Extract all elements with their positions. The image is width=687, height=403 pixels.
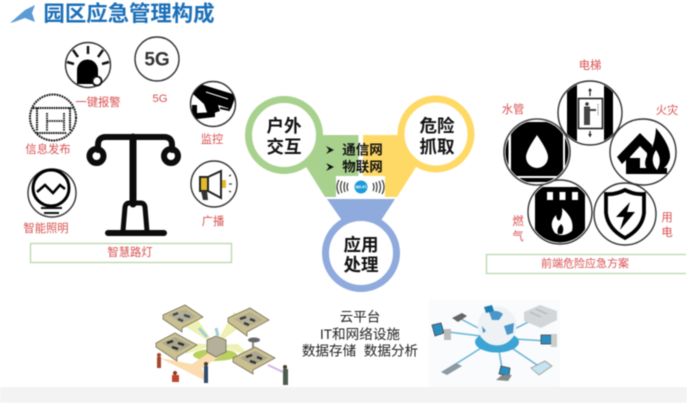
text: cloud platform: 云平台 <box>340 310 380 324</box>
icon: wifi: Wi-Fi <box>356 184 366 190</box>
label: gas: 燃 <box>512 214 524 228</box>
label: gas <box>512 214 524 243</box>
node: outdoor interaction: 户外 <box>266 116 302 136</box>
node: hazard capture: 抓取 <box>420 137 455 157</box>
icon: gas <box>528 180 592 244</box>
node: hazard capture: 危险 <box>420 116 455 136</box>
icon: information display <box>30 94 76 140</box>
text: networks: 通信网 <box>342 142 383 158</box>
icon: 5G: 5G <box>144 50 170 70</box>
text: networks <box>326 142 383 174</box>
title: 园区应急管理构成 <box>43 1 215 26</box>
label: gas: 气 <box>512 229 524 243</box>
node: application processing: 应用 <box>344 235 378 255</box>
text: cloud platform: 数据存储 数据分析 <box>302 344 418 358</box>
node: application processing: 处理 <box>344 255 379 275</box>
connector: blue <box>327 199 395 222</box>
image: global network <box>429 300 560 387</box>
caption box: smart street lamp: 智慧路灯 <box>107 245 153 259</box>
label: information release: 信息发布 <box>25 142 71 156</box>
icon: one-key alarm <box>66 42 110 88</box>
icon: smart lighting <box>28 169 76 217</box>
icon: fire <box>610 119 676 185</box>
caption box: front-end hazard plan: 前端危险应急方案 <box>541 256 629 270</box>
text: networks: 物联网 <box>342 158 383 174</box>
node: outdoor interaction <box>248 100 320 170</box>
label: one-key alarm: 一键报警 <box>75 95 121 109</box>
node: outdoor interaction: 交互 <box>266 137 302 157</box>
node: hazard capture <box>401 99 471 169</box>
icon: electricity shield <box>594 183 656 245</box>
caption box: front-end hazard plan <box>486 254 686 274</box>
icon: wifi <box>336 176 385 198</box>
label: broadcast: 广播 <box>202 214 225 228</box>
label: 5G: 5G <box>152 93 168 105</box>
panel: front-end hazard response <box>486 59 686 274</box>
label: water pipe: 水管 <box>502 102 524 116</box>
label: elevator: 电梯 <box>579 59 601 72</box>
icon: water pipe <box>504 119 570 185</box>
panel: cloud platform <box>156 300 560 387</box>
icon: 5G <box>135 37 179 81</box>
icon: street lamp <box>90 137 178 233</box>
label: electricity: 用 <box>661 212 673 224</box>
icon: elevator <box>558 80 622 146</box>
panel: centre network diagram <box>248 99 471 288</box>
icon: surveillance camera <box>190 82 236 128</box>
connector: yellow <box>363 135 416 197</box>
node: application processing <box>326 218 396 288</box>
text: cloud platform: IT和网络设施 <box>320 327 400 342</box>
label: fire: 火灾 <box>656 103 678 117</box>
image: isometric park rooms <box>156 305 288 385</box>
connector: green <box>305 135 358 197</box>
label: surveillance: 监控 <box>201 132 223 146</box>
icon: title arrow <box>10 5 35 23</box>
label: smart lighting: 智能照明 <box>23 221 69 235</box>
label: electricity: 电 <box>661 226 673 239</box>
icon: loudspeaker <box>191 161 237 207</box>
caption box: smart street lamp <box>30 244 232 262</box>
label: electricity <box>661 212 673 239</box>
panel: smart street lamp <box>23 37 237 262</box>
text: cloud platform <box>302 310 418 358</box>
